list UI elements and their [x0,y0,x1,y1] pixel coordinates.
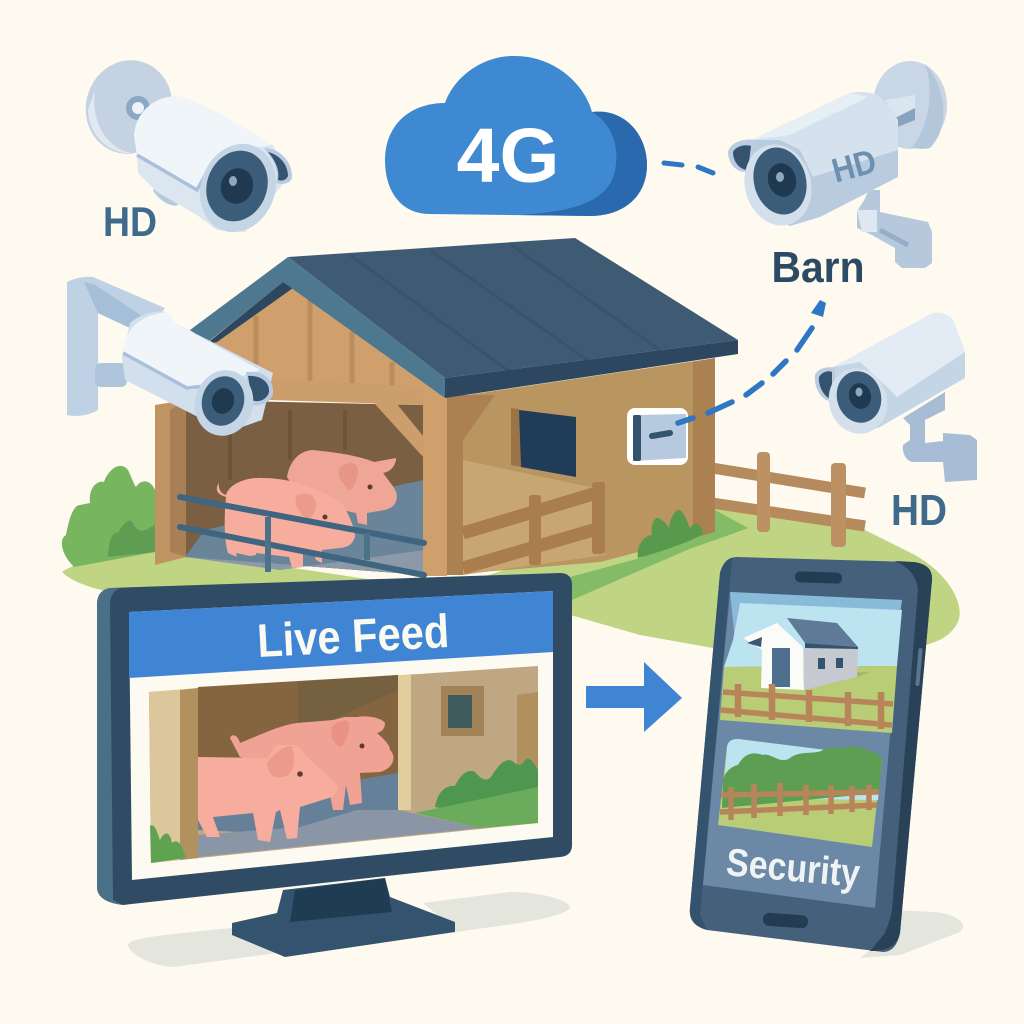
phone picture 2 [718,739,882,847]
connection: cloud to camera [664,163,713,173]
arrow to phone [586,662,682,732]
front pig [217,478,355,568]
camera: mid right [815,313,977,482]
barn [155,238,738,576]
window [511,408,521,467]
phone picture 1 [720,592,902,733]
ground: grass [62,505,960,650]
monitor frame [97,573,572,905]
camera: top right [728,61,947,268]
sensor box [627,408,693,465]
side fence [463,492,600,568]
feed pigs [230,716,393,810]
home button [763,912,808,929]
monitor screen [129,591,553,880]
cloud: 4G: 4G [457,113,559,199]
camera: top left [75,50,292,243]
beams [155,400,186,565]
phone [690,557,963,958]
barn opening [186,400,424,575]
phone body [690,557,932,952]
pigs in barn [217,450,397,568]
feed image [149,666,538,863]
monitor stand [232,878,455,957]
pen rails [180,497,424,575]
back pig [287,450,397,525]
security label: Security [724,841,862,896]
cloud: 4G [385,56,647,216]
label: HD right: HD [891,486,947,535]
roof [288,238,738,378]
bush left [62,466,155,567]
phone shadow [860,910,963,958]
connection: sensor to Barn [678,300,826,423]
bush near barn [638,510,703,558]
monitor: Live Feed [256,604,450,667]
barn gable [205,280,445,405]
barn floor [185,480,424,575]
fence right [712,452,865,547]
monitor shadow [128,892,570,967]
label: Barn: Barn [772,243,864,292]
phone screen [703,592,902,908]
monitor [97,573,572,967]
barn side wall [447,358,715,575]
camera: barn mount left [67,277,273,442]
live feed header [129,591,553,678]
label: HD top left: HD [103,198,157,245]
camera: top right: HD [828,142,880,190]
